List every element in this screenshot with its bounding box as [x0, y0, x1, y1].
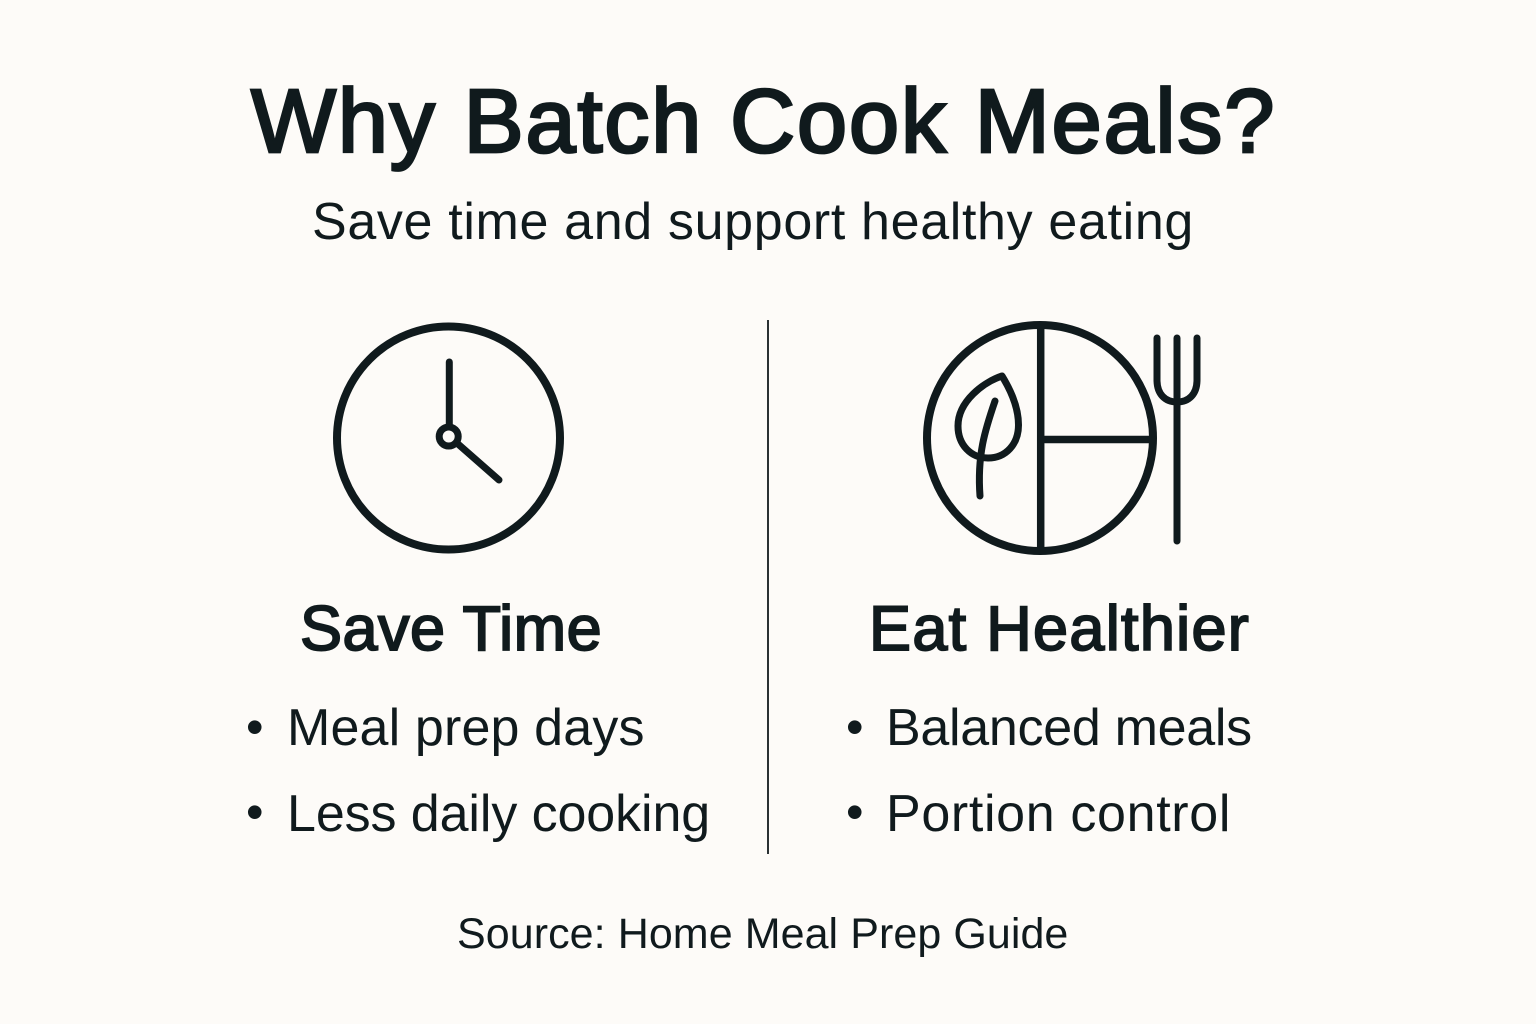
source: Source: Home Meal Prep Guide: [457, 910, 1068, 958]
list: eat healthier: [846, 699, 1252, 843]
icon: clock: [333, 322, 564, 554]
list: eat healthier: •: [846, 784, 864, 840]
list: eat healthier: Portion control: [886, 785, 1231, 843]
list: save time: •: [246, 784, 264, 840]
list: save time: [246, 699, 710, 843]
list: save time: •: [246, 699, 264, 755]
list: save time: Meal prep days: [287, 699, 645, 757]
list: eat healthier: Balanced meals: [886, 699, 1252, 757]
list: eat healthier: •: [846, 699, 864, 755]
title: Why Batch Cook Meals?: [251, 72, 1276, 172]
heading: eat healthier: Eat Healthier: [869, 594, 1250, 664]
subtitle: Save time and support healthy eating: [312, 193, 1194, 251]
list: save time: Less daily cooking: [287, 785, 710, 843]
divider: [767, 320, 769, 854]
icon: plate with leaf and fork: [923, 321, 1200, 555]
heading: save time: Save Time: [300, 594, 602, 664]
